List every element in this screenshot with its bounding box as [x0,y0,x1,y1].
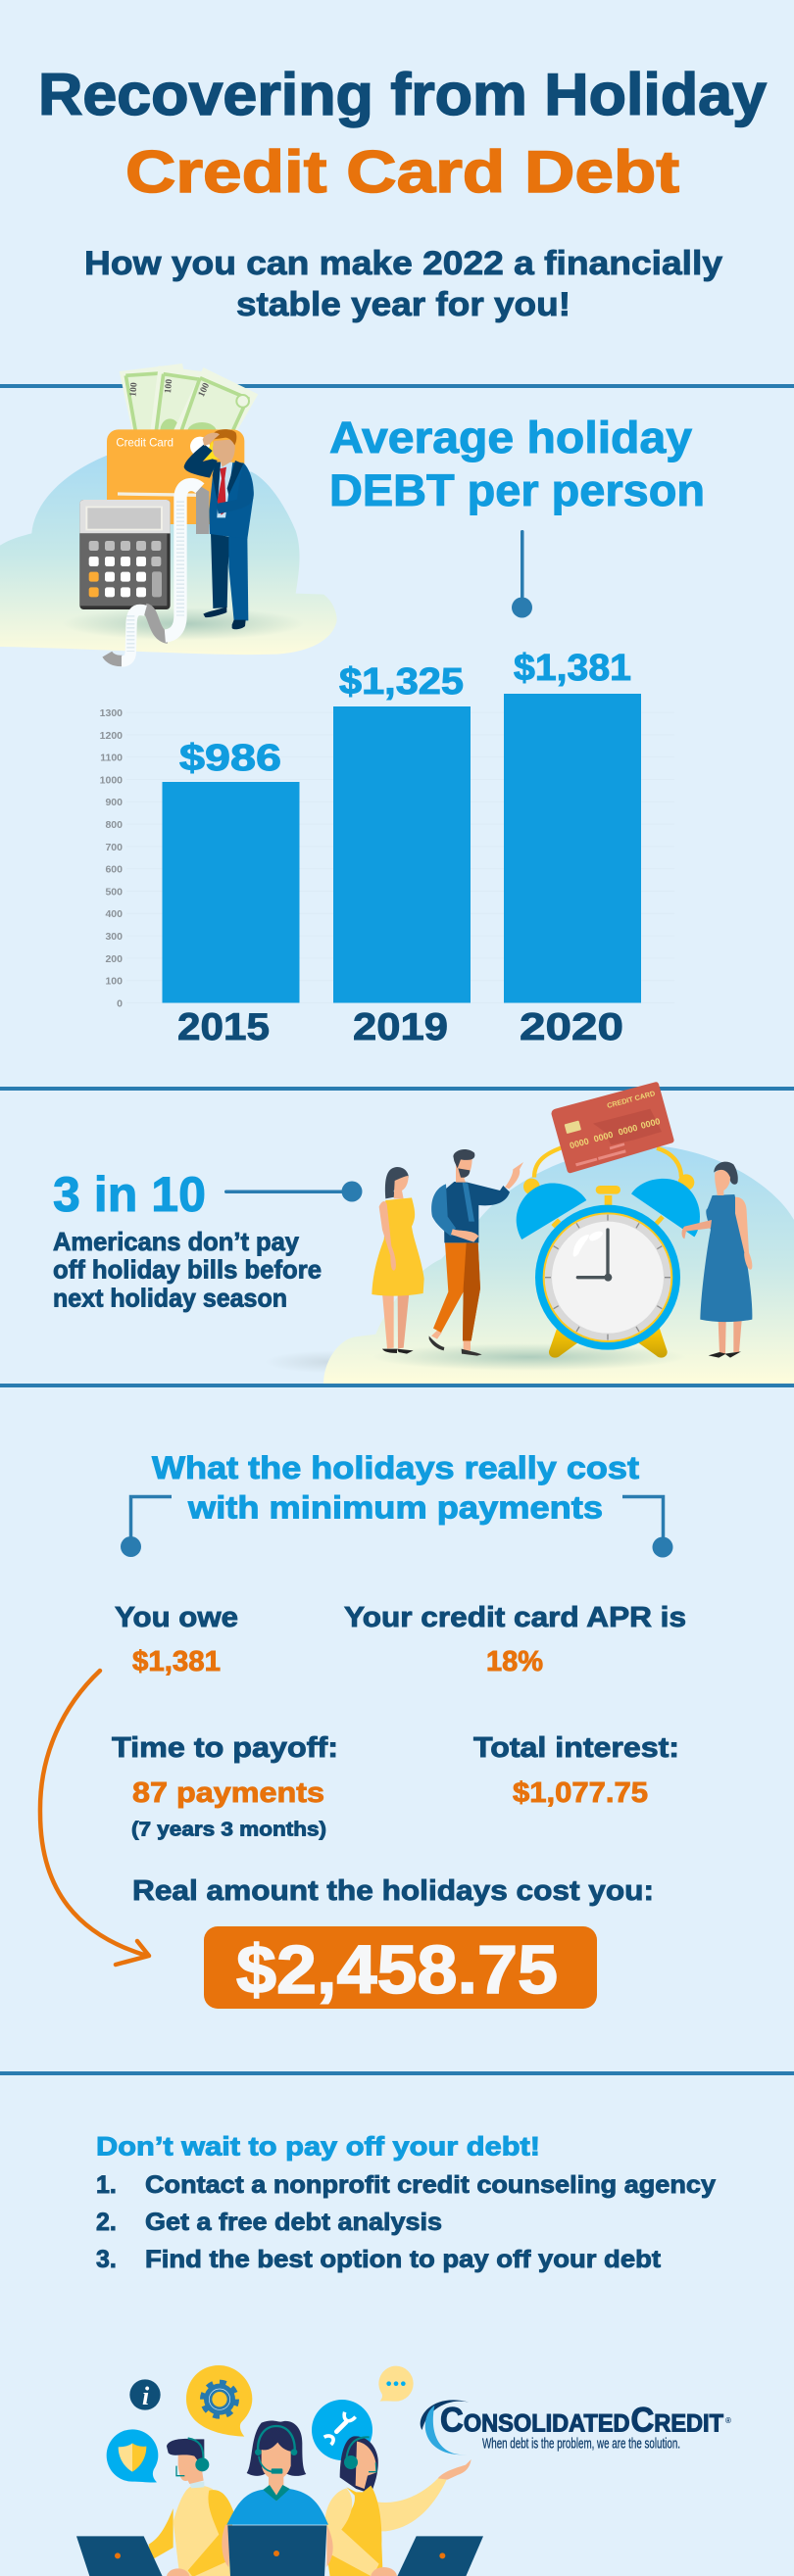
icon: banknotes: 100 [163,378,174,394]
stat description: next holiday season [53,1284,287,1313]
action list [96,2171,716,2273]
arrow: curved orange [40,1671,149,1965]
callout: total cost: $2,458.75 [236,1931,558,2008]
heading: what the holidays really cost [152,1450,639,1525]
bar 2015: 2015 [177,1006,270,1048]
icon: info: i [142,2382,150,2410]
icon: shield bubble [107,2429,158,2483]
stat: APR: Your credit card APR is [344,1602,686,1633]
call to action heading: Don’t wait to pay off your debt! [96,2132,540,2162]
logo registered mark: ® [725,2416,731,2425]
action list: Find the best option to pay off your debt [145,2246,662,2273]
chart grid and axis: 300 [105,931,123,943]
receipt ribbon [107,483,209,661]
chart grid and axis: 600 [105,864,123,876]
action list: 3. [96,2246,117,2273]
icon: red credit card: 0000 [640,1116,661,1131]
icon: red credit card: 0000 [593,1130,615,1144]
subtitle: How you can make 2022 a financially [84,245,722,282]
figure: center agent [222,2420,333,2567]
divider 3 [0,1384,794,1387]
stat: you owe [115,1602,238,1677]
divider 1 [0,384,794,388]
icon: gear bubble [186,2365,252,2437]
icon: banknotes: 100 [196,381,212,399]
bar 2020: 2020 [520,1006,623,1048]
stat: time to payoff: (7 years 3 months) [131,1819,326,1840]
chart grid and axis [100,707,674,1009]
laptops [76,2525,483,2576]
icon: calculator [79,500,171,609]
stat: time to payoff: 87 payments [132,1777,324,1809]
title: Recovering from Holiday [38,62,768,127]
stat description [53,1227,322,1313]
icon: red credit card: 0000 [618,1123,639,1138]
icon: alarm clock [517,1146,700,1358]
heading: average holiday debt [329,413,705,515]
icon: orange credit card: Credit Card [116,437,174,450]
bar 2020: $1,381 [514,648,631,689]
illustration: people and alarm clock [265,1082,794,1384]
connector line with dot [512,530,532,617]
stat: 3 in 10: 3 in 10 [53,1167,206,1222]
icon: banknotes: 100 [127,382,140,397]
stat description: Americans don’t pay [53,1227,300,1256]
chart grid and axis: 1100 [100,753,123,764]
stat: you owe: You owe [115,1602,238,1633]
icon: chat bubble [378,2366,414,2402]
bar 2020 [504,648,641,1048]
chart grid and axis: 200 [105,953,123,965]
figure: bearded man pointing [429,1149,523,1356]
real amount label: Real amount the holidays cost you: [132,1875,654,1907]
subtitle [84,245,722,323]
heading: average holiday debt: Average holiday [329,413,692,462]
bar 2019 [333,661,471,1048]
chart grid and axis: 100 [105,976,123,988]
chart grid and axis: 900 [105,797,123,808]
chart grid and axis: 700 [105,842,123,853]
bar 2015: $986 [179,738,281,779]
bar chart [100,648,674,1048]
icon: orange credit card [107,429,244,524]
figure: right agent [325,2436,471,2576]
action list: 1. [96,2171,117,2199]
figure: woman in blue dress [682,1162,752,1358]
chart grid and axis: 400 [105,908,123,920]
icon: red credit card [551,1082,674,1173]
logo wordmark: CONSOLIDATED CREDIT [440,2401,723,2440]
stat: total interest [473,1732,679,1809]
stat: you owe: $1,381 [132,1646,221,1677]
stat: APR [344,1602,686,1677]
figure: left agent [149,2438,235,2576]
stat: total interest: Total interest: [473,1732,679,1764]
bar 2019: $1,325 [339,661,464,703]
action list: Contact a nonprofit credit counseling agency [145,2171,716,2199]
figure: man in blue suit [184,429,254,629]
chart grid and axis: 0 [117,997,123,1009]
stat description: off holiday bills before [53,1254,322,1284]
bar 2015 [163,738,300,1048]
title [38,62,768,205]
icon: red credit card: CREDIT CARD [606,1089,656,1110]
stat: time to payoff: Time to payoff: [112,1732,338,1764]
icon: red credit card: 0000 [569,1136,590,1150]
chart grid and axis: 1300 [100,707,123,719]
heading: average holiday debt: DEBT per person [329,465,705,515]
chart grid and axis: 1200 [100,730,123,742]
logo: Consolidated Credit [421,2400,731,2454]
logo crescent [421,2400,469,2454]
action list: 2. [96,2209,117,2236]
action list: Get a free debt analysis [145,2209,442,2236]
figure: woman in yellow dress [372,1167,424,1354]
stat: APR: 18% [486,1646,543,1677]
icon: wrench bubble [312,2400,372,2460]
heading: what the holidays really cost: What the holidays really cost [152,1450,639,1485]
stat: total interest: $1,077.75 [513,1777,648,1809]
stat: time to payoff [112,1732,338,1840]
right bracket with dot [622,1497,672,1558]
bar 2019: 2019 [353,1006,448,1048]
title: Credit Card Debt [125,139,679,205]
divider 2 [0,1087,794,1091]
stat: 3 in 10 [53,1167,363,1222]
heading: what the holidays really cost: with minimum payments [187,1489,603,1525]
left bracket with dot [121,1497,172,1557]
subtitle: stable year for you! [236,286,571,323]
illustration: man with credit card, calculator and receipt [0,364,337,661]
divider 4 [0,2071,794,2075]
icon: info [129,2379,161,2410]
icon: banknotes [120,364,258,444]
chart grid and axis: 1000 [100,774,123,786]
chart grid and axis: 800 [105,819,123,831]
logo tagline: When debt is the problem, we are the solution. [482,2436,680,2452]
chart grid and axis: 500 [105,886,123,898]
illustration: support team [76,2365,483,2576]
